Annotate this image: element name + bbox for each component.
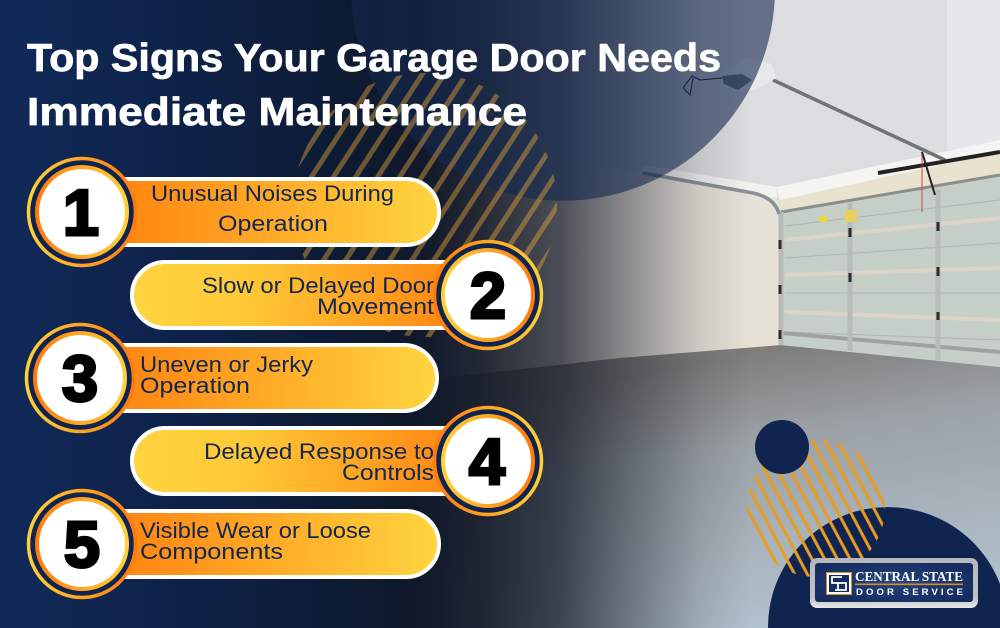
badge 1 — [28, 158, 136, 266]
bottom-right navy circle — [768, 507, 1000, 628]
pill 4 — [132, 428, 511, 494]
sign 3 text: Operation — [140, 373, 250, 398]
logo wordmark: CENTRAL STATE — [855, 569, 963, 584]
sign 4 text: Delayed Response to — [204, 439, 434, 464]
title: Top Signs Your Garage Door Needs — [27, 37, 721, 80]
pill 3 — [58, 345, 437, 411]
logo icon — [826, 572, 852, 595]
badge 4: 4 — [469, 425, 505, 498]
pill 5 — [60, 511, 439, 577]
garage side wall — [380, 165, 781, 385]
badge 3: 3 — [62, 342, 98, 415]
garage floor — [380, 345, 1000, 628]
garage door panels — [780, 175, 1000, 367]
boards leaning on wall — [723, 335, 768, 346]
badge 1: 1 — [63, 176, 99, 249]
logo wordmark — [855, 569, 963, 598]
sign 5 — [28, 490, 439, 598]
door header — [777, 140, 1000, 212]
faded diagonal stripe circle — [293, 73, 557, 337]
pill 1 — [60, 179, 439, 245]
sign 4 text: Controls — [342, 460, 434, 485]
sign 3 text: Uneven or Jerky — [140, 352, 313, 377]
badge 2 — [434, 242, 542, 348]
title: Immediate Maintenance — [27, 91, 527, 134]
opener rail and hardware — [643, 58, 1000, 214]
wall top molding — [643, 165, 777, 198]
badge 5 — [28, 490, 136, 598]
pill 2 — [132, 262, 511, 328]
sign 4 — [132, 408, 542, 514]
sign 1 text: Operation — [218, 211, 328, 236]
large translucent navy circle — [351, 0, 775, 201]
badge 3 — [26, 324, 134, 432]
sign 5 text: Visible Wear or Loose — [140, 518, 371, 543]
sign 2 text — [202, 273, 434, 319]
sign 1 — [28, 158, 439, 266]
badge 2: 2 — [470, 259, 506, 332]
small navy circle — [755, 420, 809, 474]
sign 4 text — [204, 439, 434, 485]
logo: Central State Door Service — [810, 558, 978, 608]
sign 2 — [132, 242, 542, 348]
logo wordmark: DOOR SERVICE — [856, 587, 963, 598]
badge 5: 5 — [64, 508, 100, 581]
sign 3 text — [140, 352, 313, 398]
sign 1 text: Unusual Noises During — [151, 181, 394, 206]
badge 4 — [434, 408, 542, 514]
sign 5 text — [140, 518, 371, 564]
sign 5 text: Components — [140, 539, 283, 564]
orange stripe circle — [747, 439, 885, 577]
sign 3 — [26, 324, 437, 432]
sign 1 text — [151, 181, 394, 236]
title — [27, 37, 721, 134]
sign 2 text: Slow or Delayed Door — [202, 273, 434, 298]
sign 2 text: Movement — [317, 294, 434, 319]
